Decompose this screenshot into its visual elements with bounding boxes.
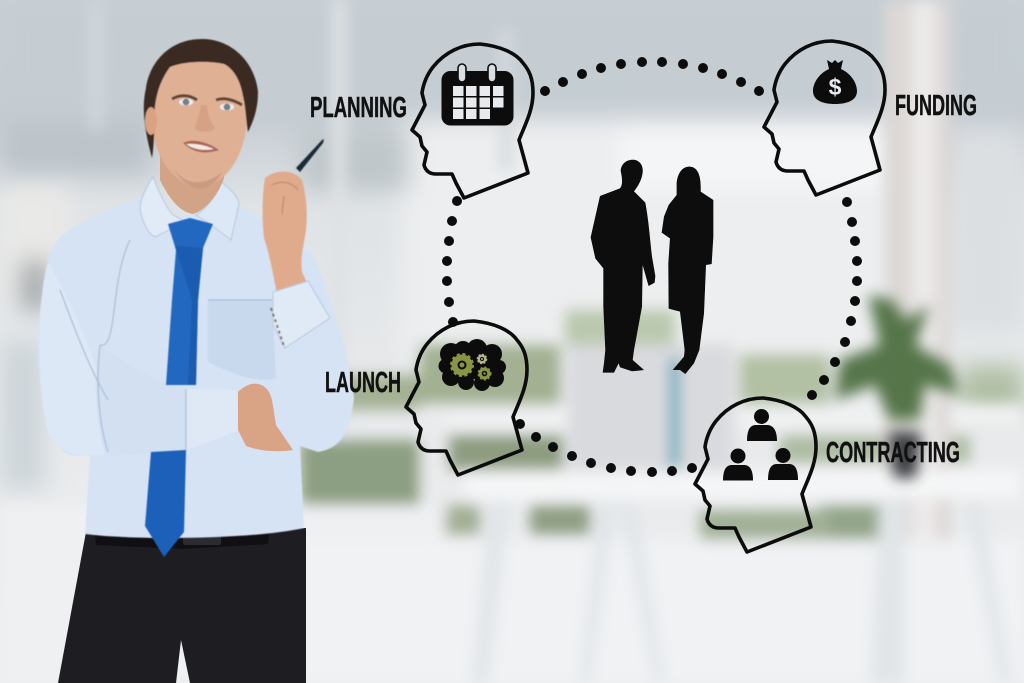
shirt [38, 177, 354, 538]
trousers and belt [58, 527, 306, 683]
shirt cuff [273, 281, 330, 348]
label: launch: LAUNCH [325, 367, 401, 399]
label: funding: FUNDING [895, 90, 977, 122]
silhouette: woman [662, 167, 713, 374]
head and face [144, 39, 258, 188]
label: planning: PLANNING [310, 92, 407, 124]
silhouette: man [591, 160, 655, 373]
head outline: planning [412, 44, 533, 198]
head outline: contracting [695, 398, 816, 552]
icon: money bag: $ [829, 74, 842, 100]
businessman photo cut-out [38, 39, 354, 683]
node: launch [325, 321, 527, 475]
icon: calendar [442, 64, 514, 126]
icon: money bag [813, 60, 857, 104]
dotted cycle connecting the heads [442, 57, 862, 477]
icon: group of three people [723, 409, 798, 480]
raised hand holding pen [263, 139, 330, 348]
node: contracting [695, 398, 960, 552]
head outline: funding [764, 41, 885, 195]
neck [160, 150, 226, 214]
icon: gears in a cloud [438, 339, 506, 391]
central silhouettes of two business people [591, 160, 713, 374]
crossed hand [238, 384, 293, 451]
shirt collar [140, 177, 185, 237]
blurred potted plant [835, 295, 960, 478]
node: planning [310, 44, 533, 198]
head outline: launch [406, 321, 527, 475]
necktie [145, 218, 213, 557]
node: funding [764, 41, 977, 195]
